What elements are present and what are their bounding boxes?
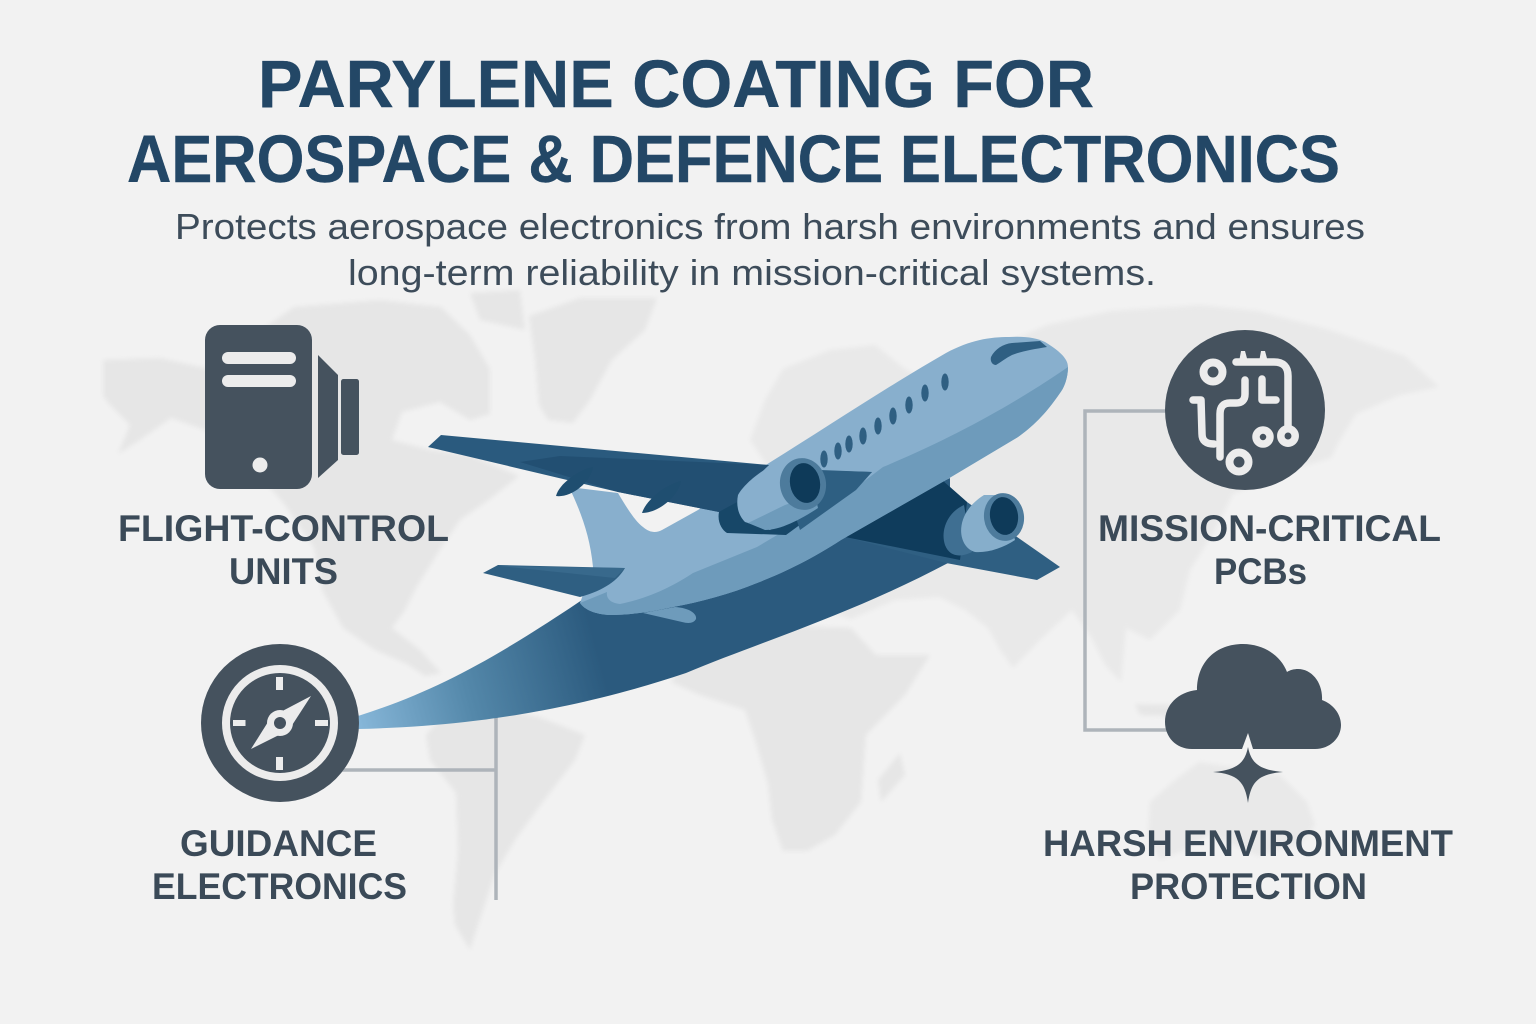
label: mission-critical PCBs [1098,508,1441,592]
subtitle: Protects aerospace electronics from harsh environments and ensures [175,206,1365,247]
subtitle: long-term reliability in mission-critical systems. [348,252,1156,293]
label: mission-critical PCBs: MISSION-CRITICAL [1098,508,1441,549]
cockpit window [991,341,1047,365]
wing root fairing [719,470,872,535]
flap track pods [556,467,593,496]
contrail [358,478,950,729]
near engine [737,454,830,530]
connector lines [340,411,1170,900]
subtitle [175,206,1365,293]
label: harsh environment protection: PROTECTION [1130,866,1367,907]
near wing [428,435,769,512]
icon: cloud with star [1165,644,1341,803]
icon: compass [201,644,359,802]
tail fin and fuselage [569,337,1068,615]
background world map [103,290,1439,950]
title: PARYLENE COATING FOR [258,47,1094,122]
icon: circuit board [1165,330,1325,490]
label: flight-control units: FLIGHT-CONTROL [118,508,449,549]
icon: flight-control unit [205,325,359,489]
label: flight-control units [118,508,449,592]
airplane with contrail [358,337,1068,729]
belly fairing [643,607,696,623]
tailplane [483,565,625,597]
label: harsh environment protection [1043,823,1453,907]
label: guidance electronics: ELECTRONICS [152,866,407,907]
label: flight-control units: UNITS [229,551,338,592]
title: AEROSPACE & DEFENCE ELECTRONICS [127,122,1340,197]
label: guidance electronics: GUIDANCE [180,823,377,864]
cabin windows [820,374,949,468]
far wing [845,480,1060,580]
label: harsh environment protection: HARSH ENVIRONMENT [1043,823,1453,864]
label: guidance electronics [152,823,407,907]
label: mission-critical PCBs: PCBs [1214,551,1307,592]
title [127,47,1340,197]
fuselage underside shading [580,367,1068,615]
far engine [944,490,1027,555]
